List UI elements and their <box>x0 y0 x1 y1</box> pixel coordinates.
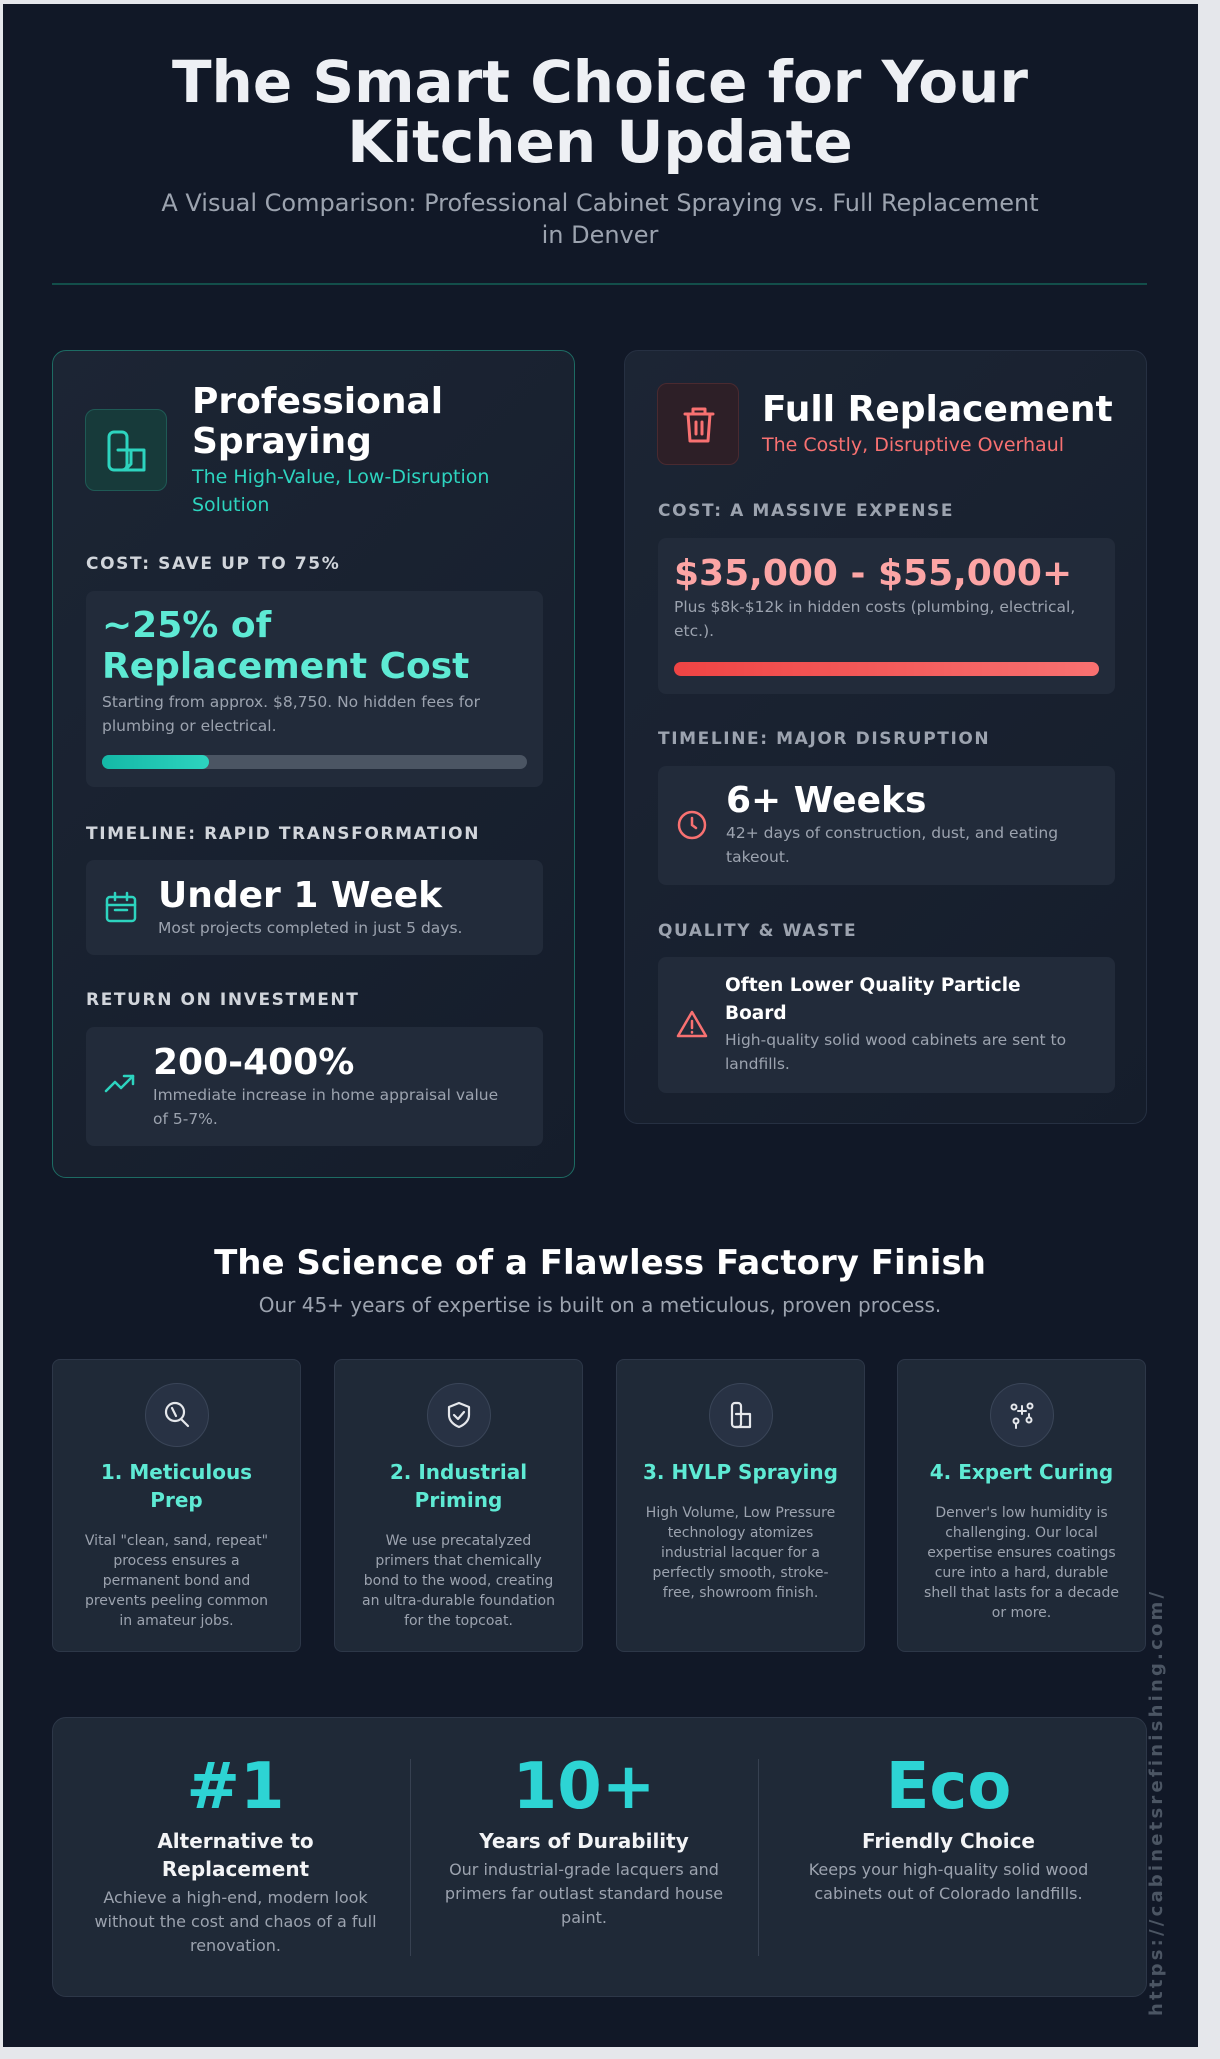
icon: calendar <box>106 892 136 922</box>
label: cost: COST: A MASSIVE EXPENSE <box>658 501 954 521</box>
stat: 10+: 10+ <box>513 1750 655 1824</box>
step 1: Prep <box>150 1488 203 1512</box>
subheading: The Costly, Disruptive Overhaul <box>762 434 1064 456</box>
stat: #1: Alternative to <box>157 1829 314 1853</box>
step 1 <box>52 1359 301 1652</box>
title <box>172 48 1028 176</box>
title: Kitchen Update <box>347 108 853 176</box>
section subtitle: Our 45+ years of expertise is built on a meticulous, proven process. <box>259 1293 941 1317</box>
icon: magnifier <box>145 1383 209 1447</box>
timeline box: 42+ days of construction, dust, and eating takeout. <box>726 824 1058 866</box>
heading: Spraying <box>192 421 372 462</box>
subtitle <box>161 189 1039 249</box>
stat: #1: Replacement <box>162 1857 309 1881</box>
stat: eco: Eco <box>886 1750 1011 1824</box>
roi box <box>86 1027 543 1146</box>
stat: eco <box>809 1750 1088 1903</box>
step 1: Vital "clean, sand, repeat" process ensures a permanent bond and prevents peeling common in amateur jobs. <box>85 1533 268 1629</box>
cost box <box>658 538 1115 694</box>
cost box <box>86 591 543 787</box>
stat: #1 <box>94 1750 377 1955</box>
cost box: Plus $8k-$12k in hidden costs (plumbing, electrical, etc.). <box>674 598 1075 640</box>
roi box: Immediate increase in home appraisal value of 5-7%. <box>153 1086 498 1128</box>
subheading: The High-Value, Low-Disruption <box>192 466 489 488</box>
label: cost: COST: SAVE UP TO 75% <box>86 554 340 574</box>
subtitle: A Visual Comparison: Professional Cabinet Spraying vs. Full Replacement <box>161 189 1039 217</box>
icon: trend <box>104 1074 134 1092</box>
panel: full replacement <box>624 350 1147 1124</box>
timeline box <box>86 860 543 955</box>
label: timeline: TIMELINE: MAJOR DISRUPTION <box>658 729 990 749</box>
step 3 <box>616 1359 865 1652</box>
bar <box>674 662 1099 676</box>
cost box: Replacement Cost <box>102 646 469 687</box>
cost box: $35,000 - $55,000+ <box>674 553 1072 594</box>
step 2 <box>334 1359 583 1652</box>
timeline box <box>658 766 1115 885</box>
timeline box: 6+ Weeks <box>726 780 926 821</box>
roi box: 200-400% <box>153 1042 354 1083</box>
step 3: High Volume, Low Pressure technology atomizes industrial lacquer for a perfectly smooth, stroke-free, showroom finish. <box>646 1505 835 1601</box>
quality box: High-quality solid wood cabinets are sent to landfills. <box>725 1031 1066 1073</box>
step 2: Priming <box>415 1488 502 1512</box>
step 3: 3. HVLP Spraying <box>643 1460 838 1484</box>
stat: 10+: Years of Durability <box>479 1829 689 1853</box>
icon: drops <box>990 1383 1054 1447</box>
icon: warning <box>676 1010 708 1038</box>
progress bar <box>102 755 527 769</box>
icon: spray <box>85 409 167 491</box>
stat: #1: Achieve a high-end, modern look without the cost and chaos of a full renovation. <box>94 1888 377 1955</box>
cost box: Starting from approx. $8,750. No hidden fees for plumbing or electrical. <box>102 693 480 735</box>
watermark url: https://cabinetsrefinishing.com/ <box>1146 1589 1167 2016</box>
icon: trash <box>657 383 739 465</box>
label: quality: QUALITY & WASTE <box>658 921 857 941</box>
stat: 10+ <box>445 1750 723 1927</box>
stats panel <box>52 1717 1147 1997</box>
subheading <box>192 466 489 516</box>
timeline box: Under 1 Week <box>158 875 442 916</box>
icon: spray <box>709 1383 773 1447</box>
step 2: 2. Industrial <box>390 1460 527 1484</box>
heading <box>192 381 443 462</box>
step 4: 4. Expert Curing <box>930 1460 1113 1484</box>
heading: Professional <box>192 381 443 422</box>
label: roi: RETURN ON INVESTMENT <box>86 990 359 1010</box>
label: timeline: TIMELINE: RAPID TRANSFORMATION <box>86 824 480 844</box>
subtitle: in Denver <box>542 221 658 249</box>
title: The Smart Choice for Your <box>172 48 1028 116</box>
step 4 <box>897 1359 1146 1652</box>
stat: eco: Friendly Choice <box>862 1829 1035 1853</box>
step 2: We use precatalyzed primers that chemically bond to the wood, creating an ultra-durable foundation for the topcoat. <box>362 1533 555 1629</box>
stat: 10+: Our industrial-grade lacquers and primers far outlast standard house paint. <box>445 1860 723 1927</box>
subheading: Solution <box>192 494 269 516</box>
timeline box: Most projects completed in just 5 days. <box>158 919 462 937</box>
quality box <box>658 957 1115 1093</box>
heading: Full Replacement <box>762 389 1113 430</box>
stat: eco: Keeps your high-quality solid wood cabinets out of Colorado landfills. <box>809 1860 1088 1903</box>
step 4: Denver's low humidity is challenging. Our local expertise ensures coatings cure into a hard, durable shell that lasts for a decade or more. <box>924 1505 1119 1621</box>
quality box: Often Lower Quality Particle Board <box>725 975 1021 1024</box>
stat: #1: #1 <box>186 1750 285 1824</box>
icon: clock <box>678 810 706 840</box>
panel: professional spraying <box>52 350 575 1178</box>
icon: shield <box>427 1383 491 1447</box>
section heading: science: The Science of a Flawless Factory Finish <box>214 1243 986 1283</box>
cost box: ~25% of <box>102 605 271 646</box>
step 1: 1. Meticulous <box>101 1460 252 1484</box>
